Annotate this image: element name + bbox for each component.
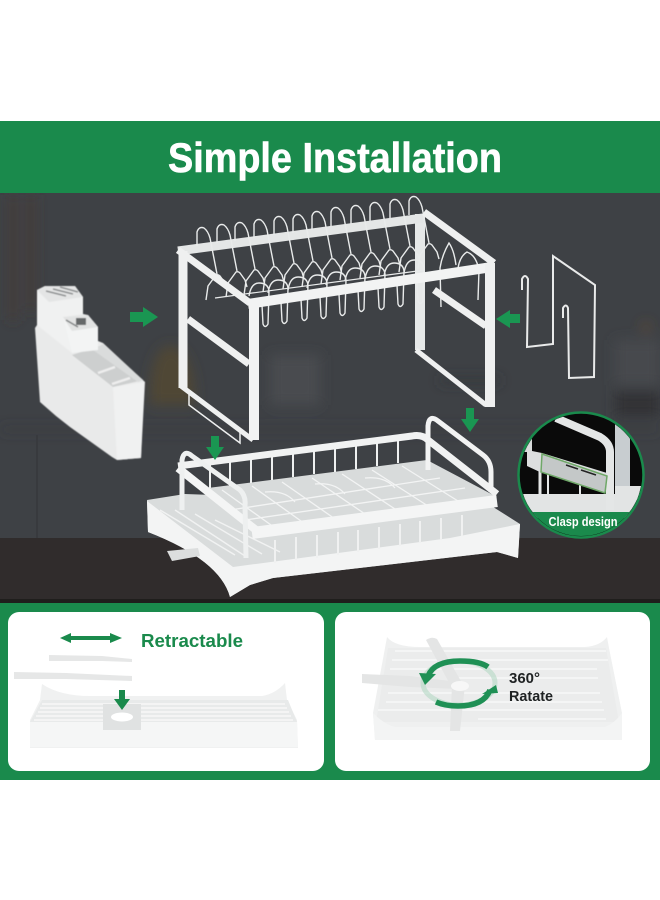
clasp design callout — [518, 412, 644, 542]
bottom green band — [0, 603, 660, 780]
arm pieces — [14, 655, 132, 681]
double arrow — [60, 633, 122, 643]
drip tray — [147, 494, 520, 597]
arrow: down left — [206, 436, 224, 460]
rear rail — [178, 218, 423, 251]
rotate label — [509, 671, 553, 705]
arrow: left toward rack — [496, 310, 520, 328]
plate wires — [197, 196, 479, 326]
rotate label: 360° — [509, 671, 540, 687]
rotate label: Ratate — [509, 689, 553, 705]
left handle — [182, 453, 246, 558]
right end frame — [416, 212, 494, 407]
arm peg — [167, 548, 200, 561]
retractable label: Retractable — [141, 631, 243, 651]
panel: 360 rotate — [335, 612, 650, 771]
upper plate rack — [178, 196, 494, 443]
handle arch — [556, 418, 610, 510]
body silhouette — [35, 286, 145, 460]
tray floor — [200, 460, 497, 537]
arrow: right toward rack — [130, 307, 158, 327]
tray — [30, 683, 298, 748]
clasp side bar — [527, 451, 606, 475]
thin front wire — [215, 270, 425, 298]
utensil compartments — [72, 345, 143, 387]
panel: retractable — [8, 612, 324, 771]
lower drying tray — [147, 418, 520, 597]
right handle — [428, 418, 491, 492]
wire hook — [522, 256, 595, 378]
tray — [373, 637, 622, 740]
rim — [178, 436, 497, 494]
title band — [0, 121, 660, 193]
clasp label: Clasp design — [548, 515, 618, 529]
arrow: down right — [461, 408, 479, 432]
rotating arms — [362, 638, 469, 731]
clasp plate — [541, 454, 607, 493]
upright post — [615, 424, 630, 486]
clasp base — [518, 494, 643, 518]
strut bars — [275, 515, 462, 563]
arrow: down into tray — [114, 690, 130, 710]
knife and utensil holder — [35, 286, 145, 460]
infographic — [0, 121, 660, 780]
back bars — [210, 437, 398, 488]
rotation arrows — [419, 661, 498, 706]
title: Simple Installation — [168, 134, 502, 181]
second block — [63, 315, 98, 353]
kitchen photo background — [0, 192, 660, 603]
front rail — [248, 267, 492, 304]
side face — [113, 382, 144, 460]
wires — [538, 471, 542, 494]
back right leg — [415, 214, 425, 350]
front left leg — [249, 306, 259, 440]
knife block — [37, 287, 83, 353]
left end frame — [178, 250, 253, 443]
